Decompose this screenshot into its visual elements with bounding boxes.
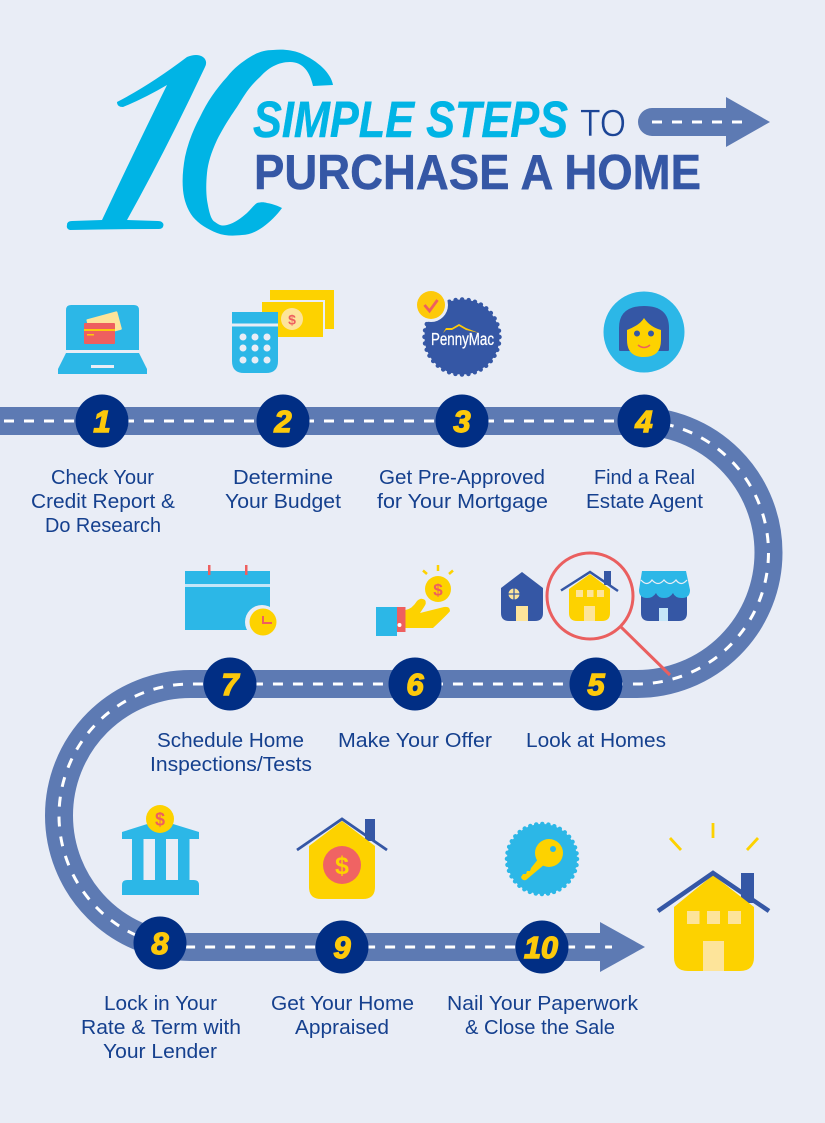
- icon: calendar with clock: [185, 565, 279, 639]
- number badge 1: 1: [93, 404, 111, 439]
- heading line 2: PURCHASE A HOME: [254, 146, 701, 200]
- big numeral 10: [67, 50, 333, 236]
- step 7: [150, 565, 312, 776]
- icon: money and calculator: $: [288, 312, 296, 328]
- number badge 4: [618, 394, 670, 448]
- number badge 8: 8: [151, 926, 169, 961]
- step 5: [501, 553, 690, 752]
- icon: finished house with rays: [658, 823, 769, 971]
- label 7: Inspections/Tests: [150, 753, 312, 776]
- heading word: to: TO: [580, 103, 626, 145]
- icon: PennyMac badge: [414, 288, 500, 374]
- label 9: Appraised: [295, 1016, 389, 1039]
- icon: yellow house: [561, 571, 618, 621]
- step 6: [338, 565, 492, 752]
- arrow: title road: [638, 97, 770, 147]
- number badge 9: [316, 920, 368, 974]
- number badge 1: [76, 394, 128, 448]
- icon: hand holding coin: [376, 565, 453, 636]
- icon: key badge: [507, 824, 577, 894]
- step 3: [377, 288, 551, 513]
- number badge 10: 10: [524, 930, 558, 965]
- number badge 5: 5: [587, 667, 605, 702]
- label 10: & Close the Sale: [465, 1016, 615, 1039]
- icon: money and calculator: [232, 290, 334, 373]
- step 10: [447, 824, 644, 1039]
- label 5: Look at Homes: [526, 729, 666, 752]
- icon: house with dollar sign: $: [335, 852, 349, 880]
- icon: bank with coin: [122, 805, 199, 895]
- step 2: [225, 290, 341, 513]
- label 4: Find a Real: [594, 466, 695, 489]
- label 9: Get Your Home: [271, 992, 414, 1015]
- number badge 3: [436, 394, 488, 448]
- number badge 6: [388, 658, 442, 710]
- road: [0, 421, 768, 972]
- number badge 10: [516, 920, 568, 974]
- label 6: Make Your Offer: [338, 729, 492, 752]
- label 8: Rate & Term with: [81, 1016, 241, 1039]
- icon: real estate agent portrait: [604, 292, 684, 372]
- icon: PennyMac badge: PennyMac: [431, 329, 494, 349]
- step 1: [31, 305, 181, 537]
- number badge 4: 4: [634, 404, 653, 439]
- number badge 6: 6: [406, 667, 424, 702]
- step 9: [271, 819, 420, 1039]
- icon: houses and magnifying glass: [501, 553, 690, 675]
- number badge 7: 7: [221, 667, 240, 702]
- icon: hand holding coin: $: [433, 580, 443, 600]
- number badge 5: [570, 658, 622, 710]
- number badge 2: [256, 394, 310, 448]
- icon: blue house: [501, 572, 543, 621]
- label 2: Your Budget: [225, 490, 341, 513]
- step 8: [81, 805, 247, 1063]
- label 8: Lock in Your: [104, 992, 217, 1015]
- label 4: Estate Agent: [586, 490, 703, 513]
- label 8: Your Lender: [103, 1040, 217, 1063]
- number badge 8: [134, 916, 186, 970]
- label 3: Get Pre-Approved: [379, 466, 545, 489]
- number badge 9: 9: [333, 930, 351, 965]
- number badge 7: [204, 658, 256, 710]
- label 1: Credit Report &: [31, 490, 175, 513]
- icon: laptop with credit cards: [58, 305, 147, 374]
- label 3: for Your Mortgage: [377, 490, 548, 513]
- label 2: Determine: [233, 466, 333, 489]
- label 10: Nail Your Paperwork: [447, 992, 639, 1015]
- step 4: [586, 292, 703, 513]
- number badge 3: 3: [453, 404, 471, 439]
- magnifying glass: [547, 553, 670, 675]
- heading line 1: SIMPLE STEPS: [253, 91, 568, 148]
- label 1: Check Your: [51, 466, 154, 489]
- icon: house with dollar sign: [297, 819, 387, 899]
- title: [67, 50, 770, 236]
- number badge 2: 2: [273, 404, 292, 439]
- icon: bank with coin: $: [155, 810, 165, 830]
- label 1: Do Research: [45, 514, 161, 537]
- label 7: Schedule Home: [157, 729, 304, 752]
- icon: shop: [639, 571, 690, 621]
